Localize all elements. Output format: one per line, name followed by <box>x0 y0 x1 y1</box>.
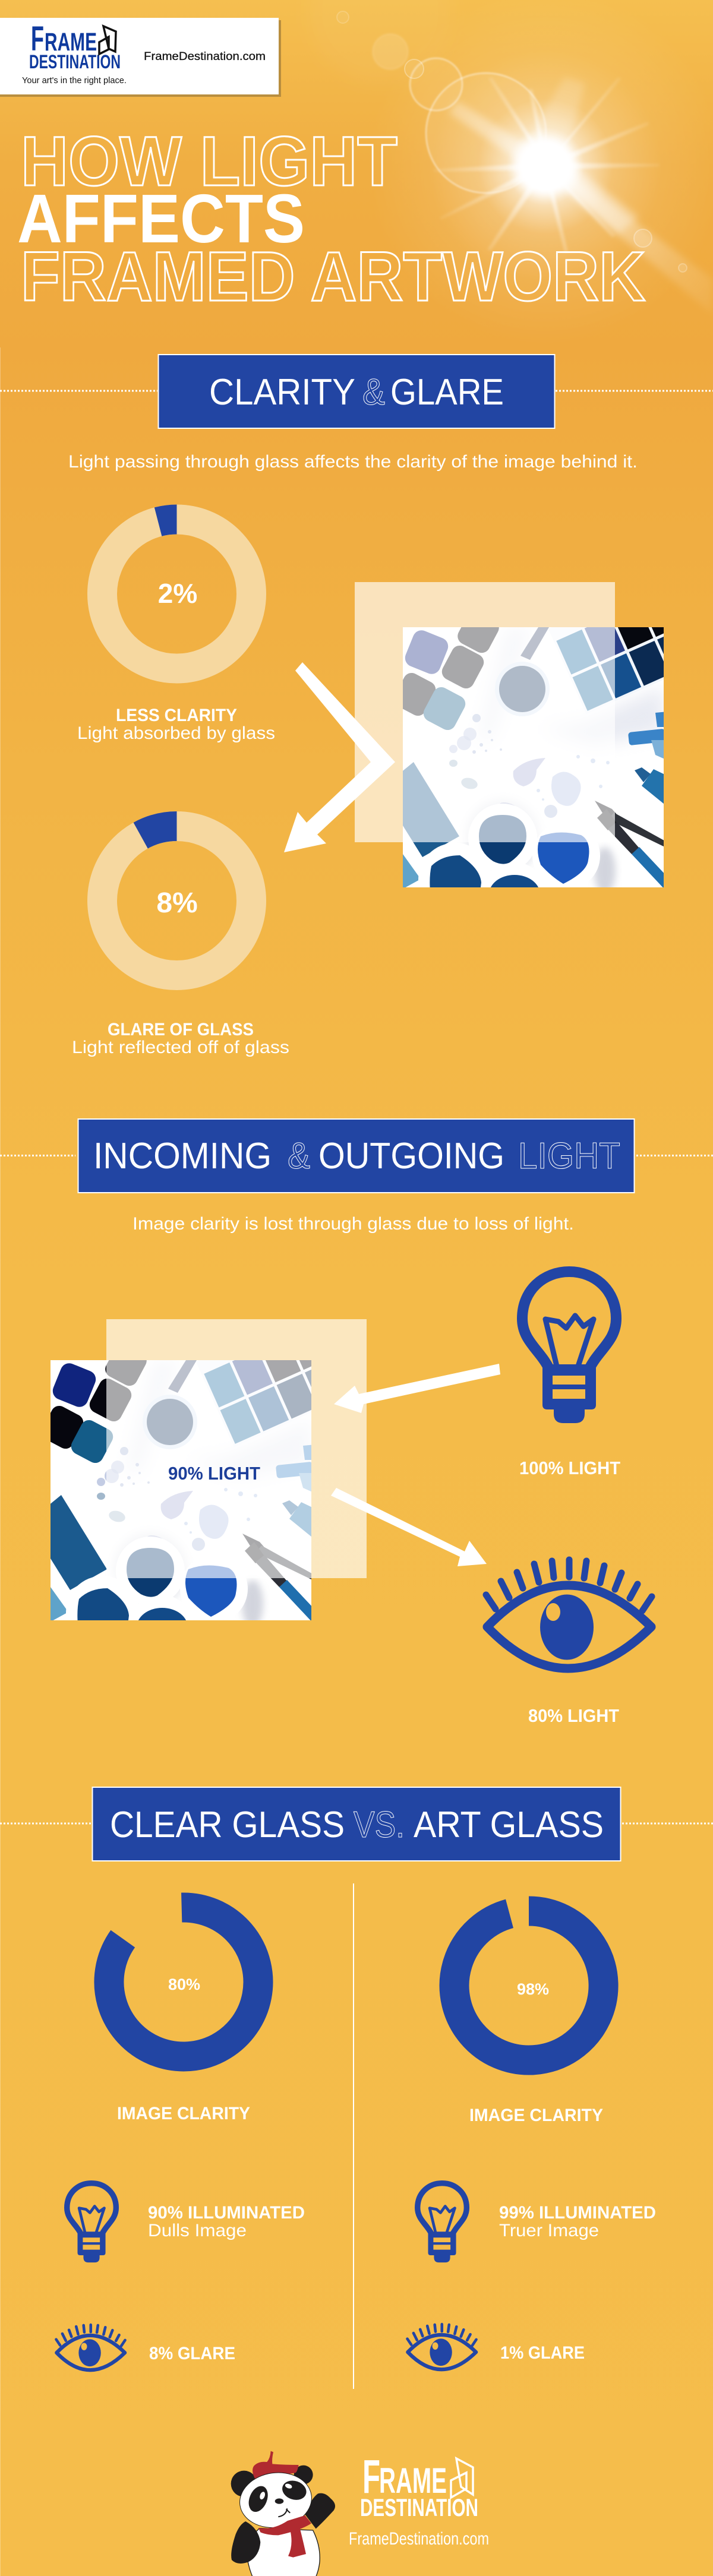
label: 100 percent light: 100% LIGHT <box>519 1458 620 1478</box>
donut: art glass 98 percent <box>455 1911 604 2060</box>
footer logo: F <box>362 2450 380 2503</box>
text: 90 percent illuminated: 90% ILLUMINATED <box>148 2203 305 2223</box>
donut: 2 percent: 2% <box>158 578 197 609</box>
icon: light bulb <box>522 1272 616 1423</box>
heading: incoming and outgoing light: LIGHT <box>518 1136 620 1177</box>
website: FrameDestination.com <box>144 50 266 63</box>
heading: clear glass vs art glass: ART GLASS <box>414 1804 604 1845</box>
text: 99 percent illuminated <box>499 2203 656 2240</box>
logo panel <box>0 18 281 97</box>
heading: clarity and glare: CLARITY <box>209 372 355 413</box>
donut: 8 percent: 8% <box>156 887 198 919</box>
section 1 intro text: Light passing through glass affects the clarity of the image behind it. <box>68 452 638 472</box>
icon: eye <box>486 1560 652 1668</box>
footer frame icon <box>451 2458 473 2498</box>
footer logo <box>349 2450 489 2549</box>
footer logo: DESTINATION <box>360 2493 478 2521</box>
heading: clarity and glare: GLARE <box>390 372 504 413</box>
footer website: FrameDestination.com <box>349 2529 489 2549</box>
label: image clarity right: IMAGE CLARITY <box>469 2106 603 2125</box>
icon: small eye right <box>407 2324 477 2369</box>
heading: clear glass vs art glass <box>93 1787 620 1861</box>
artwork photo with glass panel, 90 percent light: 90% LIGHT <box>168 1463 260 1484</box>
text: 90 percent illuminated <box>148 2203 305 2240</box>
donut: 8 percent <box>102 826 251 975</box>
logo frame icon <box>99 26 116 54</box>
footer logo: RAME <box>379 2461 447 2501</box>
label: glare of glass: Light reflected off of glass <box>72 1038 289 1057</box>
text: 90 percent illuminated: Dulls Image <box>148 2221 247 2240</box>
title <box>17 122 645 316</box>
heading: clear glass vs art glass: VS. <box>354 1804 405 1845</box>
title: HOW LIGHT <box>21 122 397 201</box>
text: 99 percent illuminated: Truer Image <box>499 2221 599 2240</box>
text: 99 percent illuminated: 99% ILLUMINATED <box>499 2203 656 2223</box>
label: image clarity left: IMAGE CLARITY <box>117 2104 250 2123</box>
artwork photo with glass panel <box>355 559 713 927</box>
section 2 dotted divider <box>0 1155 713 1156</box>
section 1 dotted divider <box>0 390 713 392</box>
label: less clarity: Light absorbed by glass <box>77 723 275 743</box>
column divider <box>353 1883 354 2389</box>
logo wordmark: F <box>31 20 44 58</box>
label: glare of glass <box>72 1020 289 1057</box>
tagline: Your art's in the right place. <box>22 76 127 86</box>
panda mascot <box>231 2451 335 2576</box>
donut: clear glass 80 percent: 80% <box>168 1976 200 1993</box>
label: 1 percent glare: 1% GLARE <box>500 2343 585 2363</box>
section 3 dotted divider <box>0 1822 713 1825</box>
heading: incoming and outgoing light: & <box>288 1136 310 1177</box>
heading: incoming and outgoing light <box>78 1119 635 1193</box>
label: glare of glass: GLARE OF GLASS <box>108 1020 254 1039</box>
left edge highlight <box>0 347 1 2576</box>
donut: art glass 98 percent: 98% <box>517 1980 549 1998</box>
label: 8 percent glare: 8% GLARE <box>149 2344 235 2363</box>
logo wordmark <box>29 20 121 72</box>
icon: small bulb right <box>418 2183 466 2262</box>
title: FRAMED ARTWORK <box>21 238 645 316</box>
section 2 intro text: Image clarity is lost through glass due to loss of light. <box>132 1214 574 1234</box>
logo wordmark: DESTINATION <box>29 51 121 72</box>
logo wordmark: RAME <box>45 28 97 56</box>
label: 80 percent light: 80% LIGHT <box>528 1705 619 1726</box>
sun flare <box>309 0 713 344</box>
heading: clear glass vs art glass: CLEAR GLASS <box>110 1804 345 1845</box>
artwork photo with glass panel, 90 percent light <box>39 1292 392 1660</box>
arrow: artwork to eye <box>331 1488 487 1566</box>
arrow: chevron to glare donut <box>284 662 395 852</box>
arrow: bulb to artwork <box>334 1364 500 1413</box>
heading: incoming and outgoing light: OUTGOING <box>318 1136 504 1177</box>
icon: small bulb left <box>67 2183 116 2262</box>
label: less clarity <box>77 706 275 743</box>
donut: 2 percent <box>102 519 251 669</box>
heading: incoming and outgoing light: INCOMING <box>93 1136 272 1177</box>
icon: small eye left <box>56 2325 125 2370</box>
label: less clarity: LESS CLARITY <box>116 706 237 725</box>
title: AFFECTS <box>17 180 305 257</box>
heading: clarity and glare <box>158 355 555 428</box>
heading: clarity and glare: & <box>362 372 385 413</box>
donut: clear glass 80 percent <box>109 1907 258 2056</box>
